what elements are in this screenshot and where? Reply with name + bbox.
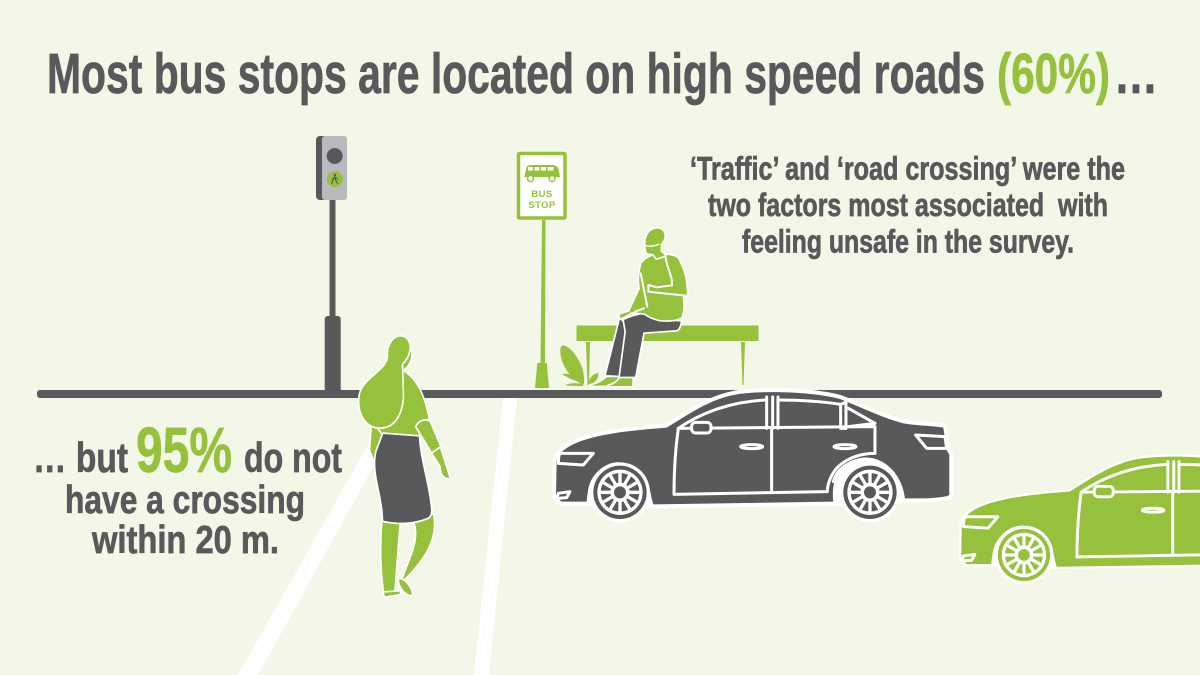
text: 95 percent without a crossing: have a crossing xyxy=(65,479,305,522)
text: 95 percent without a crossing xyxy=(33,414,342,562)
icon: bus stop sign xyxy=(518,154,565,388)
car: dark grey xyxy=(556,392,949,522)
hair xyxy=(359,337,409,427)
skirt xyxy=(375,434,431,523)
face xyxy=(400,343,411,371)
title: … xyxy=(1114,42,1158,106)
head xyxy=(645,229,665,258)
icon: bus stop sign: BUS xyxy=(531,189,553,200)
torso and arms xyxy=(619,255,687,320)
left arm xyxy=(370,427,383,459)
crossing stripe: right xyxy=(474,398,517,675)
text: 95 percent without a crossing: 95% xyxy=(136,414,232,486)
crossing stripe: left xyxy=(238,438,376,675)
text: 95 percent without a crossing: within 20 m. xyxy=(91,519,279,562)
near trouser leg xyxy=(620,313,681,377)
figure: seated man xyxy=(590,229,687,386)
text: traffic and road crossing finding xyxy=(690,150,1125,260)
icon: pedestrian traffic light xyxy=(316,136,347,398)
legs xyxy=(382,515,434,596)
icon: bus stop sign: STOP xyxy=(528,200,556,211)
text: 95 percent without a crossing: … but xyxy=(33,434,128,481)
shoes xyxy=(590,377,632,386)
figure: walking woman xyxy=(359,337,449,596)
torso xyxy=(377,371,429,437)
icon: plant xyxy=(560,346,598,386)
icon: bus xyxy=(524,165,560,182)
text: traffic and road crossing finding: feeling unsafe in the survey. xyxy=(742,224,1074,260)
road line xyxy=(37,390,1162,398)
far trouser leg xyxy=(606,319,628,376)
right arm xyxy=(417,421,441,453)
text: 95 percent without a crossing: do not xyxy=(244,434,342,481)
bench xyxy=(576,326,758,385)
title: (60%) xyxy=(997,42,1110,106)
car: green xyxy=(961,457,1200,584)
